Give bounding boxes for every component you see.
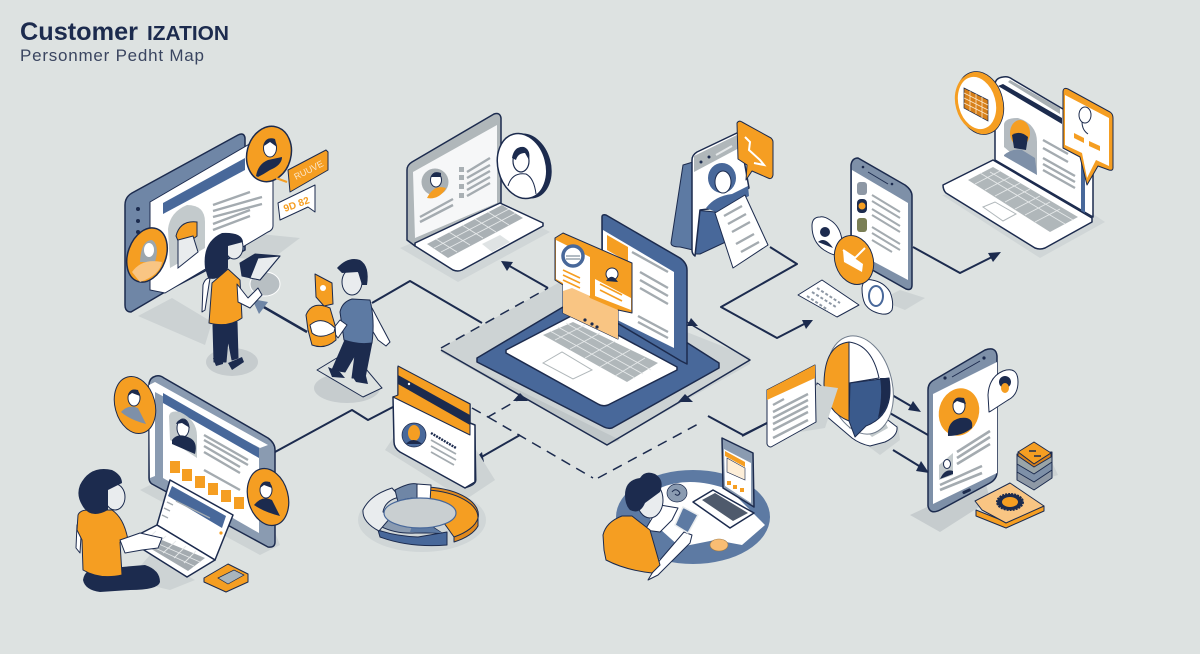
shadow: [140, 485, 280, 555]
orange bubble: [737, 121, 773, 180]
orange segment: [428, 487, 478, 542]
phone body: [928, 349, 997, 512]
monitor back panel: [125, 134, 245, 312]
document card: [800, 385, 838, 432]
panel: desk scene with woman and laptop: [603, 438, 770, 580]
gear card: [975, 483, 1044, 528]
donut chart: [358, 484, 486, 552]
panel: top centre laptop: [400, 114, 559, 282]
platform: grey base: [441, 282, 750, 445]
mini laptop screen: [722, 438, 754, 507]
avatar disc: [495, 128, 559, 204]
pie ring: [817, 329, 903, 441]
popup card: [555, 233, 632, 339]
disc top: [108, 372, 162, 438]
mini laptop base: [693, 490, 754, 528]
man: [332, 340, 372, 378]
avatar disc left: [120, 222, 174, 288]
shadow: [138, 232, 300, 345]
bucket: [306, 305, 336, 347]
bubble left: [812, 217, 842, 255]
platform: [314, 373, 380, 403]
panel: tablet with contact bubbles: [798, 158, 925, 317]
text rows: [431, 433, 456, 448]
text lines: [940, 431, 990, 490]
shadow: [400, 205, 550, 282]
orange bubble: [1063, 88, 1113, 185]
panel: standing device with document: [671, 121, 773, 268]
bottom blue segment: [378, 530, 447, 546]
round blue mat: [616, 470, 770, 564]
portrait: [1004, 118, 1037, 175]
shadow: [942, 185, 1105, 258]
speech bubble: [988, 370, 1018, 412]
disc right: [241, 464, 295, 530]
swirl object: [667, 484, 687, 502]
panel: large phone with profile: [910, 349, 1058, 532]
bubble right: [862, 280, 893, 314]
panel: man with bucket on platform: [306, 259, 390, 403]
stacked cards: [1017, 442, 1058, 490]
base: [817, 383, 897, 446]
orange mail disc: [828, 230, 880, 290]
woman standing: [202, 233, 280, 370]
laptop base: [506, 313, 677, 406]
seated woman: [76, 469, 162, 592]
arrowheads on platform: [513, 318, 698, 402]
pie slices: [824, 342, 849, 421]
tablet body: [851, 158, 912, 290]
base: [943, 160, 1092, 249]
tablet: [675, 507, 698, 533]
device: [692, 132, 749, 256]
panel: top-left monitor with standing woman: [120, 121, 328, 376]
small orange book: [204, 564, 248, 592]
avatar disc top: [241, 121, 297, 187]
blue cone stand: [671, 162, 693, 250]
profile avatar: [933, 384, 985, 440]
screen: [995, 77, 1093, 217]
left pale segment: [363, 488, 400, 531]
calendar disc: [950, 66, 1010, 140]
laptop screen: [602, 215, 687, 364]
orange oval: [710, 539, 728, 551]
connector lines and arrows: [252, 247, 1001, 478]
laptop screen: [407, 114, 501, 246]
platform: blue mat: [477, 307, 719, 428]
tag orange: [288, 150, 328, 192]
icon row: [170, 461, 244, 509]
title: [20, 18, 229, 46]
monitor: [149, 376, 275, 547]
document: [715, 195, 768, 268]
panel: pie speech bubble with document: [767, 329, 903, 455]
panel: bottom-left monitor with seated woman: [76, 372, 295, 592]
avatar: [402, 423, 426, 447]
panel: browser card: [385, 366, 495, 500]
central laptop on platform: [441, 215, 750, 445]
panel: top-right laptop: [942, 66, 1113, 258]
tablet: [240, 254, 280, 280]
small portrait: [939, 453, 953, 480]
title: Customer: [20, 18, 138, 46]
tag white: [278, 185, 315, 220]
pedestal: [250, 272, 280, 296]
laptop base: [415, 203, 543, 271]
title: IZATION: [147, 23, 229, 45]
tag white: 9D 82: [282, 195, 312, 215]
subtitle: Personmer Pedht Map: [20, 46, 204, 65]
inner well: [384, 498, 456, 528]
keyboard card: [798, 280, 859, 317]
tag orange: RUUVE: [292, 159, 325, 182]
laptop: [128, 555, 195, 590]
woman shadow: [206, 348, 258, 376]
top slate segment: [395, 484, 417, 502]
woman at desk: [603, 473, 698, 580]
